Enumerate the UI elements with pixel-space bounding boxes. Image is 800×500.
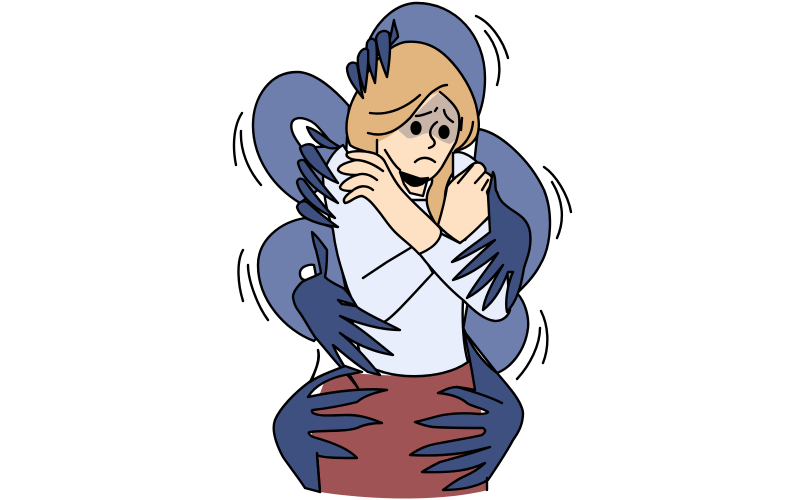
dark hand: lower left on torso [293, 232, 400, 388]
neck and lower face [377, 140, 428, 196]
face [368, 85, 473, 181]
thumb line [457, 387, 502, 403]
hand gap [338, 300, 355, 306]
sleeve fold [363, 247, 412, 278]
left hand and forearm [338, 151, 441, 254]
right upper sleeve cuff [453, 152, 487, 195]
right sleeve [418, 212, 510, 321]
skirt [310, 358, 488, 498]
dark hand: right waist [410, 327, 523, 490]
left sleeve [323, 145, 433, 324]
shirt torso [335, 200, 470, 376]
neck shadow [400, 172, 428, 186]
hair [346, 42, 479, 226]
right hand on arm [438, 163, 493, 243]
hair bang lines [368, 85, 473, 181]
eyes [412, 122, 420, 134]
dark hand: top on hair [347, 20, 398, 98]
cuff lines [465, 212, 502, 240]
neck [400, 172, 427, 196]
dark hand: left behind shoulder [297, 127, 340, 227]
brows, nose, mouth [377, 108, 453, 170]
eye shadow [398, 93, 459, 144]
dark hand: lower left waist [274, 350, 387, 492]
hair lock left [383, 215, 400, 260]
blue shadow swirls [253, 3, 550, 373]
skirt edge lines [317, 453, 487, 492]
dark hand: right on sleeve [452, 172, 530, 312]
motion lines [234, 16, 571, 379]
